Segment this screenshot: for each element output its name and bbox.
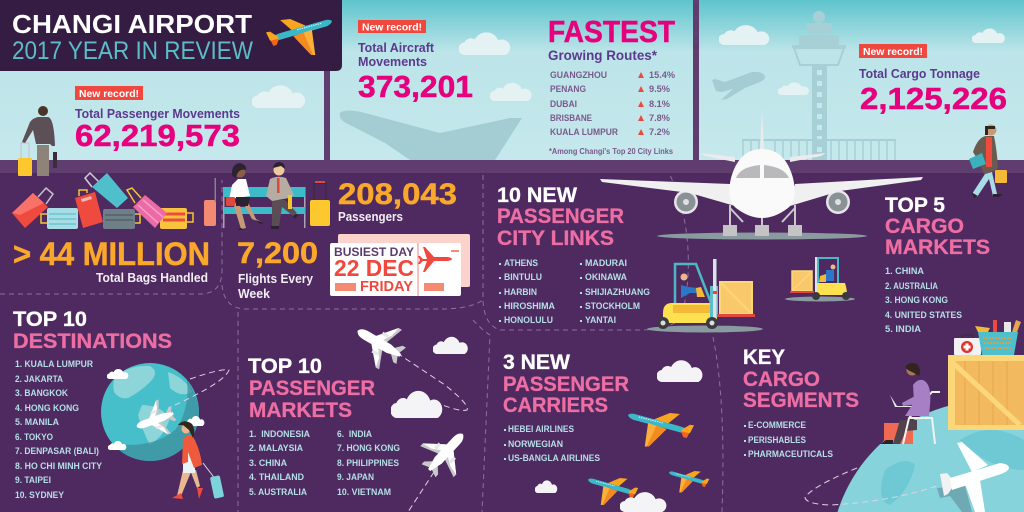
subheading: Growing Routes* xyxy=(548,47,658,63)
icon: white plane upper xyxy=(346,311,413,376)
flights figure: 7,200 xyxy=(237,237,318,270)
icon: title plane xyxy=(266,19,332,55)
number: > 44 MILLION xyxy=(13,236,210,272)
city list column 2: SHIJIAZHUANG xyxy=(585,287,650,298)
label: Total Bags Handled xyxy=(96,271,208,285)
icon: cargo globe xyxy=(838,400,1024,512)
route table: DUBAI xyxy=(550,99,577,110)
route table: 9.5% xyxy=(649,84,671,95)
icon: shopping basket xyxy=(975,320,1021,355)
city list column 2: OKINAWA xyxy=(585,272,627,283)
list column 2: 6. INDIA xyxy=(337,429,372,440)
carrier list: US-BANGLA AIRLINES xyxy=(508,453,600,464)
route table: 15.4% xyxy=(649,70,676,81)
ticket: FRIDAY xyxy=(360,278,413,295)
city list column 2: YANTAI xyxy=(585,315,616,326)
heading xyxy=(743,346,859,412)
list: 8. HO CHI MINH CITY xyxy=(15,461,103,472)
route table: KUALA LUMPUR xyxy=(550,127,618,138)
ticket: BUSIEST DAY xyxy=(334,247,414,259)
flights label: Week xyxy=(238,287,270,301)
route table xyxy=(550,70,676,138)
route table: BRISBANE xyxy=(550,113,592,124)
clouds xyxy=(390,337,468,418)
heading: TOP 10 xyxy=(13,308,87,331)
carrier list: NORWEGIAN xyxy=(508,439,563,450)
ticket xyxy=(330,234,470,296)
label: Total Cargo Tonnage xyxy=(859,67,980,81)
icon: white plane lower xyxy=(412,418,480,486)
passengers label: Passengers xyxy=(338,210,403,224)
heading xyxy=(503,351,629,417)
list: 3. HONG KONG xyxy=(885,295,948,306)
list column 1: 1. INDONESIA xyxy=(249,429,310,440)
label: Total Aircraft xyxy=(358,41,435,55)
list column 1: 5. AUSTRALIA xyxy=(249,487,307,498)
list column 2 xyxy=(337,429,400,498)
heading: KEY xyxy=(743,346,785,369)
passengers figure: 208,043 xyxy=(338,178,457,211)
list: 6. TOKYO xyxy=(15,432,53,443)
city list column 1: BINTULU xyxy=(504,272,542,283)
carrier list xyxy=(504,424,600,464)
heading: PASSENGER xyxy=(503,373,629,396)
panel: aircraft movements xyxy=(340,20,522,160)
city list column 1: HIROSHIMA xyxy=(504,301,555,312)
badge: New record! xyxy=(362,22,422,34)
icon: small forklift xyxy=(785,257,855,302)
flight path xyxy=(397,353,467,512)
traveller walking xyxy=(969,124,1007,198)
panel: top 10 passenger markets xyxy=(248,311,480,512)
heading: CITY LINKS xyxy=(497,227,614,250)
heading: DESTINATIONS xyxy=(13,330,172,353)
route table: 7.8% xyxy=(649,113,671,124)
panel: cargo tonnage xyxy=(859,44,1007,116)
flights label xyxy=(238,272,313,301)
heading: CARRIERS xyxy=(503,394,608,417)
list: 1. CHINA xyxy=(885,266,924,277)
list xyxy=(15,359,103,501)
silhouette small plane xyxy=(712,72,765,100)
control tower silhouette xyxy=(742,11,896,160)
icon: wooden crate xyxy=(948,355,1024,430)
route table: PENANG xyxy=(550,84,586,95)
list column 2: 9. JAPAN xyxy=(337,472,374,483)
heading: 3 NEW xyxy=(503,351,570,374)
list column 1 xyxy=(249,429,310,498)
city list column 1 xyxy=(499,258,555,326)
city list column 2: STOCKHOLM xyxy=(585,301,640,312)
icon: person with laptop on chair xyxy=(880,363,940,444)
dashed section dividers xyxy=(0,175,723,512)
list: 5. MANILA xyxy=(15,417,59,428)
heading xyxy=(13,308,172,353)
subtitle: 2017 YEAR IN REVIEW xyxy=(12,37,253,65)
city list column 2 xyxy=(580,258,650,326)
heading: CARGO xyxy=(743,368,820,391)
panel: new carriers xyxy=(503,351,709,512)
sky clouds xyxy=(251,25,1005,108)
icon: woman with suitcase xyxy=(172,421,224,499)
list: 3. BANGKOK xyxy=(15,388,68,399)
heading: 10 NEW xyxy=(497,184,577,207)
panel: fastest growing routes xyxy=(548,14,676,156)
route table: GUANGZHOU xyxy=(550,70,607,81)
icon: luggage pile xyxy=(12,173,193,229)
icon: seated passengers on bench xyxy=(204,162,330,230)
list: 4. HONG KONG xyxy=(15,403,79,414)
carrier list: HEBEI AIRLINES xyxy=(508,424,574,435)
heading: MARKETS xyxy=(249,399,352,422)
heading xyxy=(248,355,375,422)
panel: top 10 destinations xyxy=(13,308,229,501)
number: 2,125,226 xyxy=(860,81,1007,116)
segment list: PHARMACEUTICALS xyxy=(748,449,833,460)
heading: CARGO xyxy=(885,215,964,238)
list: 1. KUALA LUMPUR xyxy=(15,359,93,370)
route table: 8.1% xyxy=(649,99,671,110)
panel: baggage xyxy=(12,173,210,285)
list column 2: 8. PHILIPPINES xyxy=(337,458,399,469)
list: 4. UNITED STATES xyxy=(885,310,962,321)
ticket: 22 DEC xyxy=(334,255,414,281)
icon: globe with plane xyxy=(101,363,229,461)
badge: New record! xyxy=(863,46,923,58)
icon: white plane on globe xyxy=(937,442,1009,512)
flight path xyxy=(805,468,940,505)
list column 1: 2. MALAYSIA xyxy=(249,443,303,454)
list column 2: 10. VIETNAM xyxy=(337,487,391,498)
number: 373,201 xyxy=(358,69,473,104)
list xyxy=(885,266,962,335)
heading: TOP 5 xyxy=(885,194,945,217)
segment list xyxy=(744,420,833,460)
clouds xyxy=(535,360,702,512)
panel: new city links xyxy=(497,184,650,326)
number: 62,219,573 xyxy=(75,118,240,153)
heading: MARKETS xyxy=(885,236,990,259)
heading: TOP 10 xyxy=(248,355,322,378)
heading: PASSENGER xyxy=(497,205,624,228)
list: 9. TAIPEI xyxy=(15,475,51,486)
heading: FASTEST xyxy=(548,14,675,49)
silhouette plane xyxy=(340,110,522,160)
city list column 1: ATHENS xyxy=(504,258,538,269)
panel: busiest day xyxy=(204,162,470,301)
icon: traveller with suitcase xyxy=(18,106,57,176)
segment list: E-COMMERCE xyxy=(748,420,806,431)
heading: PASSENGER xyxy=(249,377,375,400)
panel: passenger movements xyxy=(18,86,240,176)
label: Movements xyxy=(358,55,427,69)
title panel xyxy=(0,0,342,71)
list column 1: 4. THAILAND xyxy=(249,472,304,483)
list: 10. SYDNEY xyxy=(15,490,65,501)
heading: SEGMENTS xyxy=(743,389,859,412)
badge: New record! xyxy=(79,88,139,100)
title text: CHANGI AIRPORT xyxy=(12,9,252,39)
flights label: Flights Every xyxy=(238,272,313,286)
list: 2. AUSTRALIA xyxy=(885,281,938,292)
list: 2. JAKARTA xyxy=(15,374,63,385)
icon: orange planes xyxy=(588,413,709,505)
big white plane xyxy=(600,110,923,240)
city list column 2: MADURAI xyxy=(585,258,627,269)
panel: top 5 cargo markets xyxy=(885,194,990,335)
heading xyxy=(885,194,990,259)
city list column 1: HONOLULU xyxy=(504,315,553,326)
list column 2: 7. HONG KONG xyxy=(337,443,400,454)
footnote: *Among Changi's Top 20 City Links xyxy=(549,147,674,156)
route table: 7.2% xyxy=(649,127,671,138)
list: 7. DENPASAR (BALI) xyxy=(15,446,99,457)
heading xyxy=(497,184,624,250)
panel: key cargo segments xyxy=(743,320,1024,512)
list: 5. INDIA xyxy=(885,324,921,335)
list column 1: 3. CHINA xyxy=(249,458,287,469)
icon: first aid kit xyxy=(954,335,981,355)
segment list: PERISHABLES xyxy=(748,435,806,446)
icon: large forklift xyxy=(647,259,763,332)
label xyxy=(358,41,435,69)
label: Total Passenger Movements xyxy=(75,107,240,121)
city list column 1: HARBIN xyxy=(504,287,537,298)
